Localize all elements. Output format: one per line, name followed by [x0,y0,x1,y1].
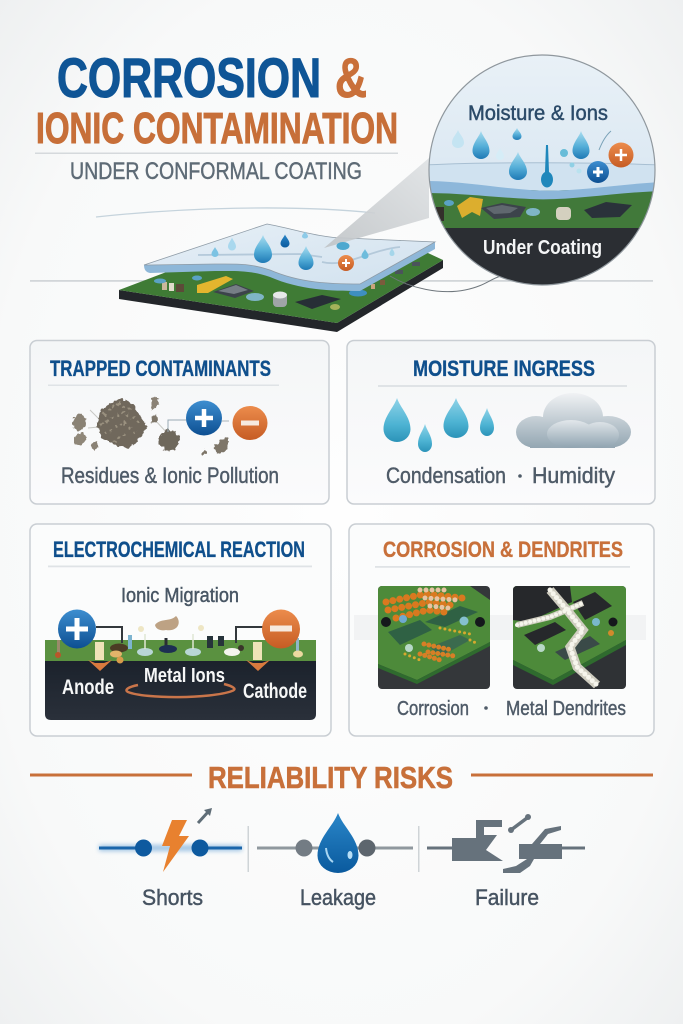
icon: water drops [384,398,494,452]
arrow: anode [88,642,112,671]
illustration: coated circuit board [119,158,443,332]
magnified ions [587,142,634,183]
anode terminal [58,610,96,648]
image: metal dendrites [513,586,626,689]
panel: trapped contaminants [30,340,329,504]
heading: TRAPPED CONTAMINANTS [50,356,271,381]
icon: failure [427,814,585,873]
icon: minus ion [222,406,268,440]
title: CORROSION [57,46,321,109]
diagram: electrochemical cell [45,610,316,720]
title: & [335,46,367,109]
caption: Corrosion [397,698,469,720]
magnified drops [452,128,611,188]
panel: electrochemical reaction [30,524,331,736]
heading: CORROSION & DENDRITES [383,537,623,562]
image: corrosion [378,586,490,689]
caption: Condensation [386,463,506,488]
magnifier beam [324,158,429,248]
water drops on slab [212,232,394,270]
label: leakage: Leakage [300,885,376,910]
icon: plus ion [186,400,222,436]
title: IONIC CONTAMINATION [36,104,398,153]
heading: reliability risks [30,760,653,795]
panel: moisture ingress: Humidity [532,463,615,488]
subtitle: UNDER CONFORMAL COATING [70,158,362,185]
caption: Residues & Ionic Pollution [61,463,279,488]
heading: ELECTROCHEMICAL REACTION [53,537,305,562]
label: metal ions: Metal Ions [144,665,225,687]
circuit board [119,240,443,332]
panel: corrosion and dendrites [349,524,654,736]
icon: leakage [257,813,413,873]
label: failure: Failure [475,885,539,910]
heading: MOISTURE INGRESS [413,356,595,381]
connector line [390,272,588,292]
icon: shorts [99,808,242,872]
cathode terminal [262,610,300,648]
label: moisture and ions: Moisture & Ions [468,102,608,125]
ion flow loop [126,684,234,697]
arrow: cathode [246,642,270,671]
positive ion on slab [338,255,354,271]
magnified board [425,190,660,288]
panel: moisture ingress [347,340,655,504]
label: anode: Anode [62,676,114,699]
heading: reliability risks: RELIABILITY RISKS [208,760,453,795]
label: cathode: Cathode [243,680,307,703]
coating slab [144,224,435,291]
magnified coating [425,163,660,191]
panel: corrosion and dendrites: Metal Dendrites [506,698,626,720]
label: shorts: Shorts [142,885,203,910]
title [36,46,398,153]
label: ionic migration: Ionic Migration [121,585,239,607]
magnifier callout [425,55,660,288]
icon: residue particles [72,397,230,454]
icon: cloud [516,393,631,448]
label: under coating: Under Coating [483,237,602,259]
